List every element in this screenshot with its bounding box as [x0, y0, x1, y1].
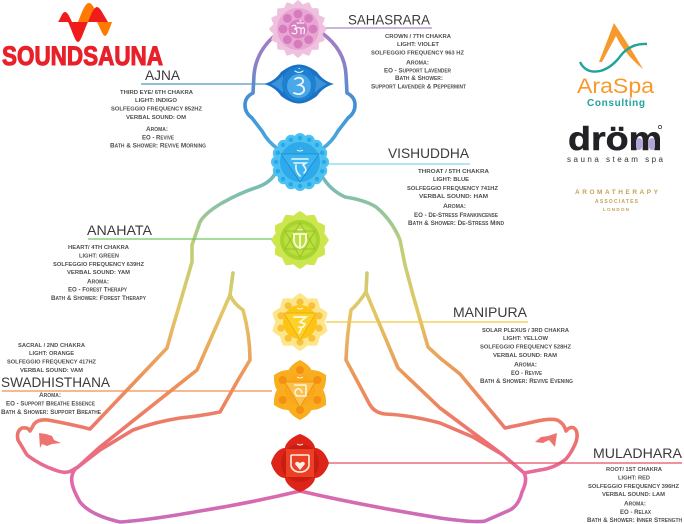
heading: SAHASRARA	[348, 12, 431, 28]
wordmark line: AROMATHERAPY	[575, 189, 659, 196]
text block: EO - De-Stress Frankincense	[414, 212, 499, 219]
icon: purple arches	[636, 138, 655, 150]
body outline	[18, 33, 577, 522]
connector line	[141, 83, 268, 85]
panel: Ajna	[110, 68, 268, 150]
text block: EO - Support Breathe Essence	[6, 400, 96, 408]
text block: Aroma:	[624, 500, 646, 508]
text block: Bath & Shower: De-Stress Mind	[408, 220, 504, 227]
wordmark: dröm	[568, 120, 662, 157]
text block	[371, 34, 466, 90]
text block: Bath & Shower: Support Breathe	[1, 409, 102, 416]
text block: LIGHT: RED	[618, 476, 650, 482]
icon: letter A with wave	[580, 23, 647, 72]
tagline: Consulting	[587, 98, 645, 109]
text block: SACRAL / 2ND CHAKRA	[18, 343, 86, 349]
heading: SWADHISTHANA	[1, 375, 111, 390]
icon: Manipura ten-petal lotus	[269, 291, 331, 353]
text block: THROAT / 5TH CHAKRA	[418, 169, 490, 175]
registered mark	[658, 125, 662, 129]
text block: Aroma:	[146, 126, 168, 133]
text block	[587, 467, 682, 524]
text block: Support Lavender & Peppermint	[371, 84, 466, 90]
connector line	[328, 163, 470, 165]
text block: LIGHT: GREEN	[79, 254, 119, 260]
logo: Aromatherapy Associates	[575, 189, 659, 212]
logo: Soundsauna	[2, 3, 163, 71]
text block: LIGHT: INDIGO	[135, 98, 177, 104]
heading: AJNA	[145, 68, 181, 83]
text block: Bath & Shower: Revive Morning	[110, 142, 206, 150]
text block: SOLFEGGIO FREQUENCY 396HZ	[588, 484, 679, 490]
text block: Aroma:	[87, 278, 109, 286]
tagline: sauna steam spa	[567, 155, 664, 164]
heading: MULADHARA	[593, 446, 683, 461]
text block: SOLFEGGIO FREQUENCY 639HZ	[53, 262, 144, 268]
text block: THIRD EYE/ 6TH CHAKRA	[120, 90, 194, 96]
text block: EO - Revive	[142, 134, 175, 142]
text block: VERBAL SOUND: OM	[126, 115, 186, 121]
text block	[1, 343, 102, 416]
icon: Ajna two-petal eye	[264, 64, 334, 104]
text block: Aroma:	[443, 203, 466, 210]
panel: Muladhara	[328, 446, 683, 524]
text block	[480, 328, 573, 385]
text block: EO - Revive	[511, 370, 543, 377]
hand mudra marks	[39, 433, 557, 448]
text block: Aroma:	[39, 392, 61, 399]
icon: Muladhara four-petal lotus	[271, 434, 329, 492]
text block: SOLFEGGIO FREQUENCY 852HZ	[111, 106, 202, 112]
panel: Swadhisthana	[1, 343, 272, 416]
heading: ANAHATA	[87, 223, 153, 238]
text block: EO - Support Lavender	[384, 68, 451, 74]
panel: Manipura	[326, 305, 573, 385]
text block	[407, 169, 504, 227]
text block	[110, 90, 206, 150]
connector line	[88, 238, 272, 240]
icon: Vishuddha sixteen-petal lotus	[271, 133, 329, 191]
logo: drom	[567, 120, 664, 164]
panel: Sahasrara	[325, 12, 466, 90]
text block	[51, 245, 147, 302]
text block: VERBAL SOUND: VAM	[20, 368, 83, 374]
text block: EO - Forest Therapy	[68, 286, 128, 294]
connector line	[328, 462, 682, 464]
connector line	[2, 390, 272, 392]
icon: Swadhisthana six-petal lotus	[267, 360, 333, 420]
text block: SOLFEGGIO FREQUENCY 417HZ	[7, 360, 96, 366]
text block: VERBAL SOUND: LAM	[602, 492, 665, 498]
text block: Bath & Shower: Inner Strength	[587, 517, 682, 524]
text block: LIGHT: YELLOW	[503, 336, 548, 342]
wordmark: AraSpa	[577, 75, 654, 98]
connector line	[325, 27, 432, 29]
icon: Sahasrara lotus	[268, 0, 328, 59]
connector line	[326, 321, 528, 323]
text block: Bath & Shower: Forest Therapy	[51, 295, 147, 302]
text block: SOLAR PLEXUS / 3RD CHAKRA	[482, 328, 570, 334]
icon: Anahata twelve-petal lotus	[269, 209, 331, 271]
text block: LIGHT: ORANGE	[29, 351, 74, 357]
text block: ROOT/ 1ST CHAKRA	[606, 467, 663, 473]
icon: sound wave	[58, 3, 112, 42]
heading: MANIPURA	[453, 305, 528, 320]
text block: VERBAL SOUND: YAM	[67, 270, 130, 276]
text block: Aroma:	[514, 362, 537, 368]
panel: Vishuddha	[328, 146, 504, 227]
text block: LIGHT: VIOLET	[397, 42, 439, 48]
text block: VERBAL SOUND: HAM	[419, 194, 488, 200]
text block: HEART/ 4TH CHAKRA	[68, 245, 130, 251]
text block: SOLFEGGIO FREQUENCY 963 HZ	[371, 50, 464, 56]
panel: Anahata	[51, 223, 272, 302]
wordmark line: ASSOCIATES	[595, 199, 639, 205]
text block: CROWN / 7TH CHAKRA	[385, 34, 452, 40]
text block: Bath & Shower:	[395, 75, 443, 82]
text block: VERBAL SOUND: RAM	[493, 353, 557, 359]
text block: SOLFEGGIO FREQUENCY 528HZ	[480, 344, 571, 350]
wordmark line: LONDON	[603, 207, 630, 212]
text block: EO - Relax	[620, 509, 652, 516]
text block: SOLFEGGIO FREQUENCY 741HZ	[407, 186, 498, 192]
text block: LIGHT: BLUE	[433, 177, 469, 183]
text block: Bath & Shower: Revive Evening	[480, 378, 573, 385]
wordmark: SOUNDSAUNA	[2, 41, 163, 71]
heading: VISHUDDHA	[388, 146, 470, 161]
text block: Aroma:	[406, 60, 429, 66]
logo: AraSpa Consulting	[577, 23, 654, 109]
